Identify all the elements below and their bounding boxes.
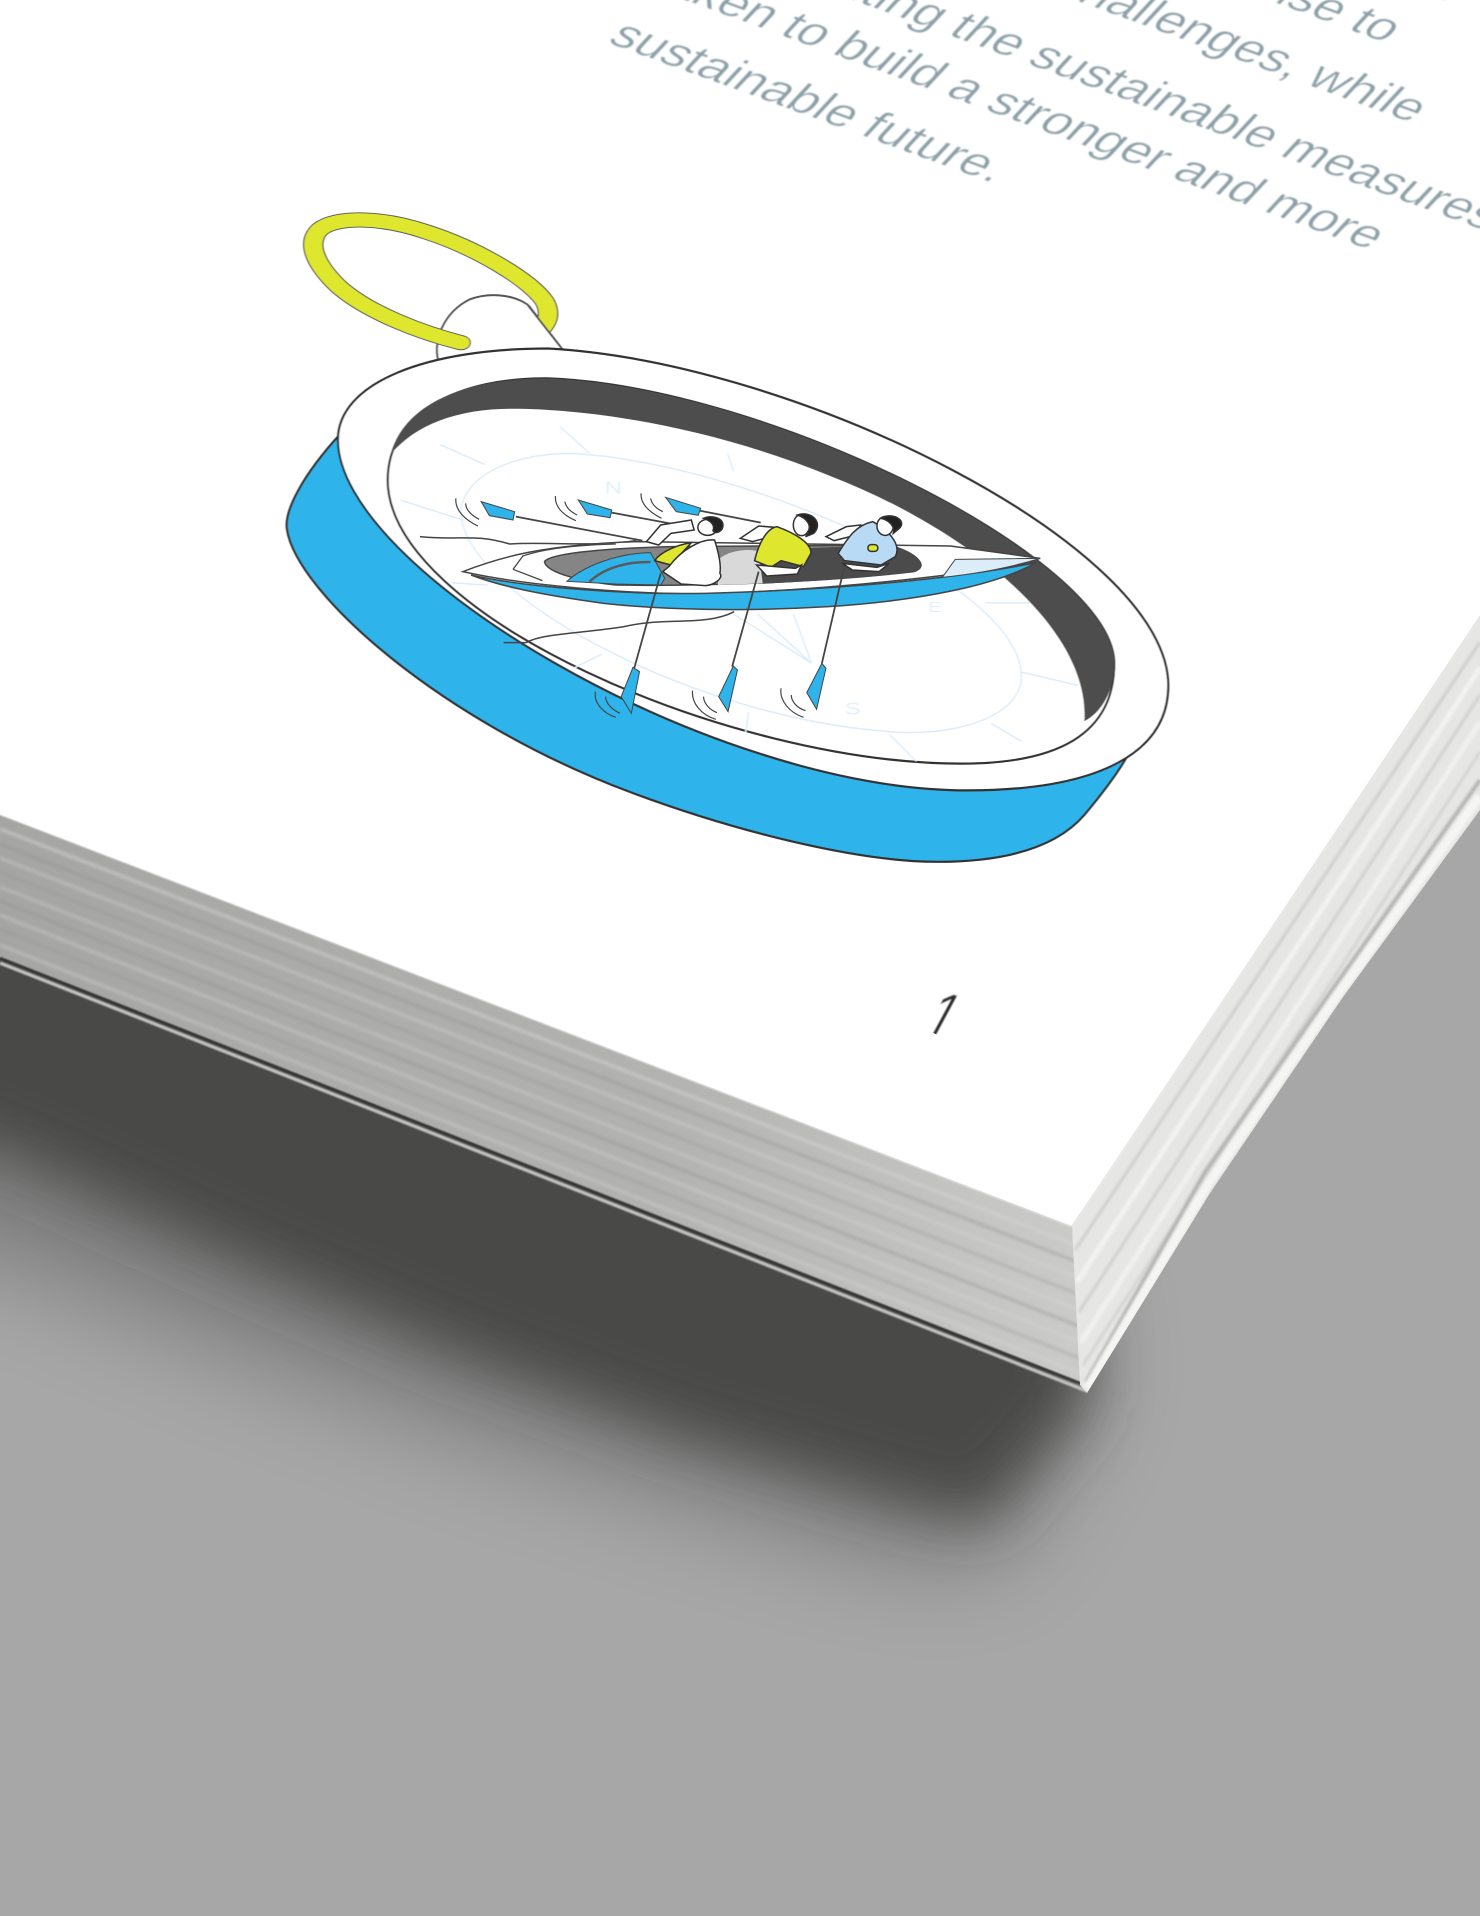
upper oars [456, 493, 761, 541]
white top page [0, 0, 1480, 1227]
rower two, yellow shirt [740, 514, 817, 576]
dial letter S: S [845, 699, 860, 719]
neck front covering ring end [509, 304, 563, 350]
stacked pages: right edge [1072, 617, 1480, 1393]
stacked pages: front edge [0, 815, 1087, 1391]
dial compass rose [401, 427, 1078, 761]
compass neck [437, 295, 563, 362]
dial letter E: E [928, 598, 942, 615]
yellow ring outline [313, 220, 548, 343]
compass dark inner wall [391, 378, 1114, 721]
water wake lines [420, 537, 734, 643]
shirt badge [868, 545, 878, 551]
compass white rim [338, 348, 1168, 790]
cockpit seat [718, 550, 763, 585]
cockpit [544, 545, 921, 585]
boat hull [463, 542, 1040, 594]
neck right edge [527, 304, 563, 350]
stern deck panel [513, 544, 616, 581]
leg shading stripe [589, 562, 651, 582]
rowing boat with three rowers [420, 493, 1040, 719]
compass illustration [287, 220, 1168, 862]
rower one, white shirt [646, 517, 723, 586]
page number: 1 [910, 977, 974, 1060]
dial letter N: N [605, 478, 622, 498]
body text paragraph: sustainable future. [599, 12, 1021, 191]
compass dial [388, 378, 1114, 764]
cockpit dark floor [759, 545, 921, 584]
cast shadow of the book [0, 800, 1090, 1560]
bow panels [942, 558, 1040, 577]
yellow ring [313, 220, 548, 343]
lower oars [595, 567, 844, 719]
rower legs in blue [567, 553, 665, 585]
boat blue stripe [471, 563, 1036, 610]
compass blue body [287, 433, 1129, 862]
rower three, blue shirt [826, 516, 902, 572]
